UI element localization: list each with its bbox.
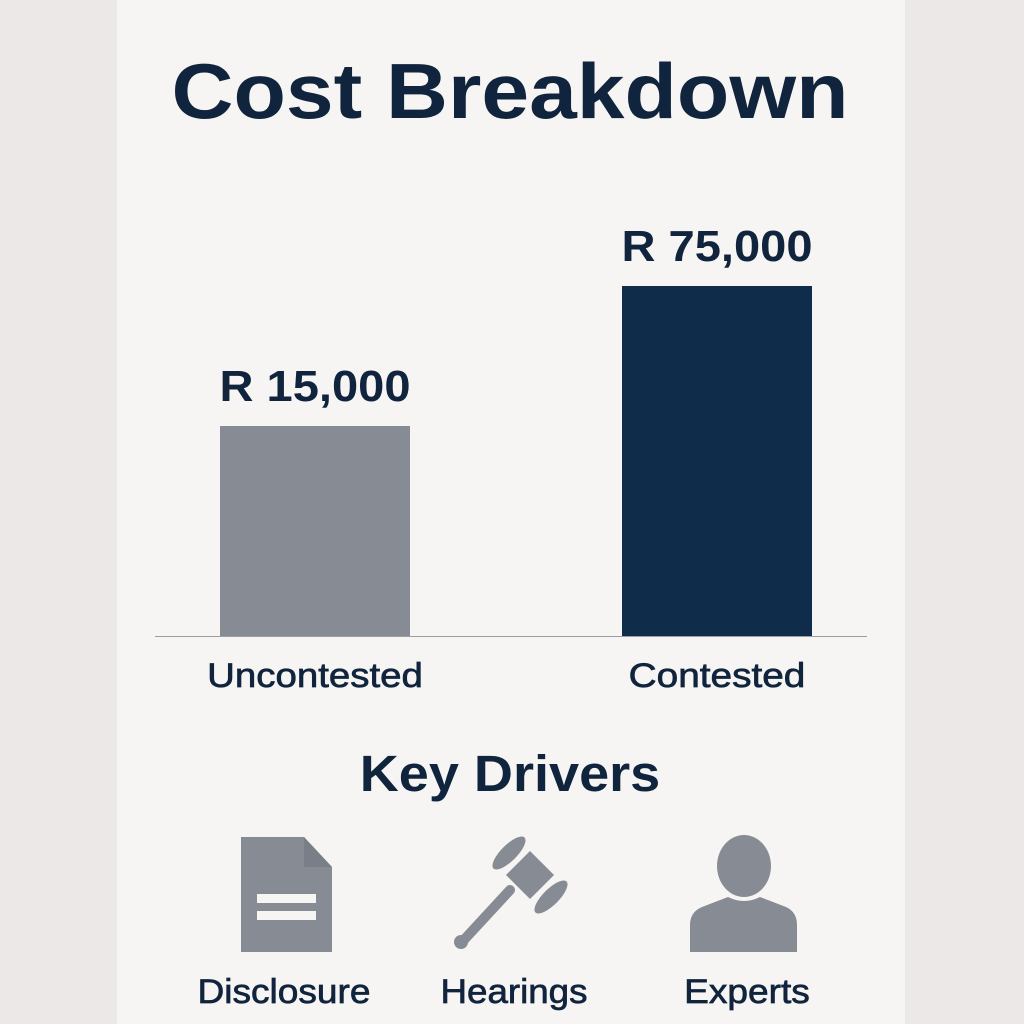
label: disclosure: Disclosure bbox=[197, 973, 371, 1011]
bar: contested bbox=[622, 286, 812, 637]
label: uncontested: Uncontested bbox=[207, 657, 423, 695]
label: hearings: Hearings bbox=[441, 973, 587, 1011]
bar chart bbox=[155, 222, 867, 695]
bar: uncontested bbox=[220, 426, 410, 637]
value: contested: R 75,000 bbox=[621, 222, 813, 271]
title: Cost Breakdown bbox=[172, 47, 848, 135]
baseline bbox=[155, 636, 867, 637]
label: contested: Contested bbox=[629, 657, 805, 695]
panel: main bbox=[117, 0, 905, 1024]
heading: key drivers: Key Drivers bbox=[360, 745, 660, 802]
value: uncontested: R 15,000 bbox=[219, 362, 411, 411]
label: experts: Experts bbox=[684, 973, 810, 1011]
